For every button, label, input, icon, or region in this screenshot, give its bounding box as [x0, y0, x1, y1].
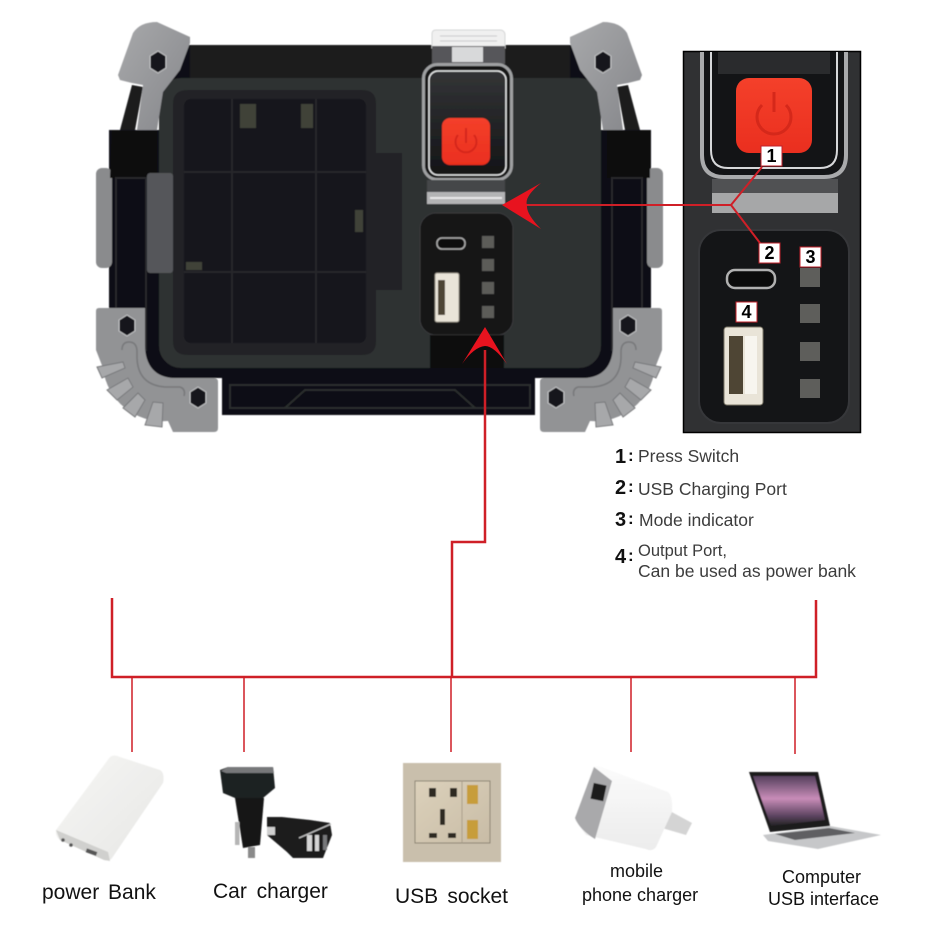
branch lines — [132, 677, 795, 754]
label: Car charger: Car charger — [213, 880, 328, 903]
side frame detail — [116, 178, 642, 350]
device: phone charger — [575, 766, 692, 850]
legend item 4: 4 — [615, 546, 627, 568]
inset clear frame — [702, 52, 846, 177]
lower strap — [430, 335, 504, 368]
side grey pads — [96, 168, 663, 268]
red connector from inset to switch — [525, 204, 731, 206]
red connector tree — [112, 350, 816, 754]
legend item 4: : — [628, 546, 634, 565]
label: mobile phone charger: phone charger — [582, 885, 698, 905]
legend item 3: 3 — [615, 509, 626, 531]
legend item 4 — [615, 542, 856, 581]
body shell — [109, 45, 651, 415]
bottom strip detail — [230, 385, 530, 408]
bottom left bumper — [96, 308, 218, 432]
device: power bank — [56, 756, 164, 861]
left side dark arm — [120, 85, 143, 130]
legend item 4: Output Port, — [638, 542, 727, 560]
legend item 2: : — [628, 477, 634, 496]
right side dark arm — [617, 85, 640, 130]
device: laptop computer — [749, 772, 881, 849]
legend — [615, 446, 856, 581]
device: car charger — [220, 767, 332, 858]
label: mobile phone charger — [582, 861, 698, 905]
inset micro USB port — [727, 270, 775, 288]
hex bolts — [119, 51, 636, 408]
port panel — [420, 213, 513, 335]
plug — [662, 810, 692, 835]
socket plate — [415, 781, 490, 843]
label: Computer USB interface: Computer — [782, 867, 861, 887]
top left bumper — [118, 22, 190, 130]
label: power Bank: power Bank — [42, 881, 156, 904]
side clamps — [110, 131, 650, 178]
arrowhead pointing to ports — [462, 327, 507, 364]
legend item 1: : — [628, 446, 634, 465]
number tag 3: 3 — [805, 247, 816, 267]
USB slots — [467, 785, 478, 839]
number tag 2 — [759, 243, 780, 263]
red power button — [442, 118, 490, 165]
number tag 1: 1 — [766, 146, 777, 166]
inner panel — [159, 78, 601, 368]
side latch — [147, 173, 173, 273]
inset close-up of switch and ports — [684, 52, 860, 432]
label: USB socket: USB socket — [395, 885, 508, 908]
arrowhead pointing to switch — [502, 183, 541, 229]
label: mobile phone charger: mobile — [610, 861, 663, 881]
top right bumper — [570, 22, 642, 130]
inset red button — [736, 78, 812, 153]
inset lower tab — [712, 179, 838, 213]
inset port panel — [699, 230, 849, 423]
inset mode indicators — [800, 268, 820, 398]
clear switch cover — [424, 30, 512, 204]
inset USB A port — [724, 327, 763, 405]
solar window — [173, 90, 402, 355]
label: Computer USB interface: USB interface — [768, 889, 879, 909]
product photo: work light rear view — [96, 22, 663, 432]
number tag 1 — [761, 146, 782, 166]
number tag 4: 4 — [741, 302, 752, 322]
number tag 3 — [800, 247, 821, 267]
legend item 1: 1 — [615, 446, 626, 468]
legend item 3: Mode indicator — [639, 510, 754, 530]
legend item 2: USB Charging Port — [638, 479, 787, 499]
legend item 1: Press Switch — [638, 446, 739, 466]
legend item 4: Can be used as power bank — [638, 561, 856, 581]
label: Computer USB interface — [768, 867, 879, 909]
device: USB wall socket — [403, 763, 501, 862]
legend item 3: : — [628, 509, 634, 528]
callout lines — [731, 167, 762, 243]
bottom right bumper — [540, 308, 662, 432]
legend item 2: 2 — [615, 477, 626, 499]
number tag 2: 2 — [764, 243, 775, 263]
number tag 4 — [736, 302, 757, 322]
